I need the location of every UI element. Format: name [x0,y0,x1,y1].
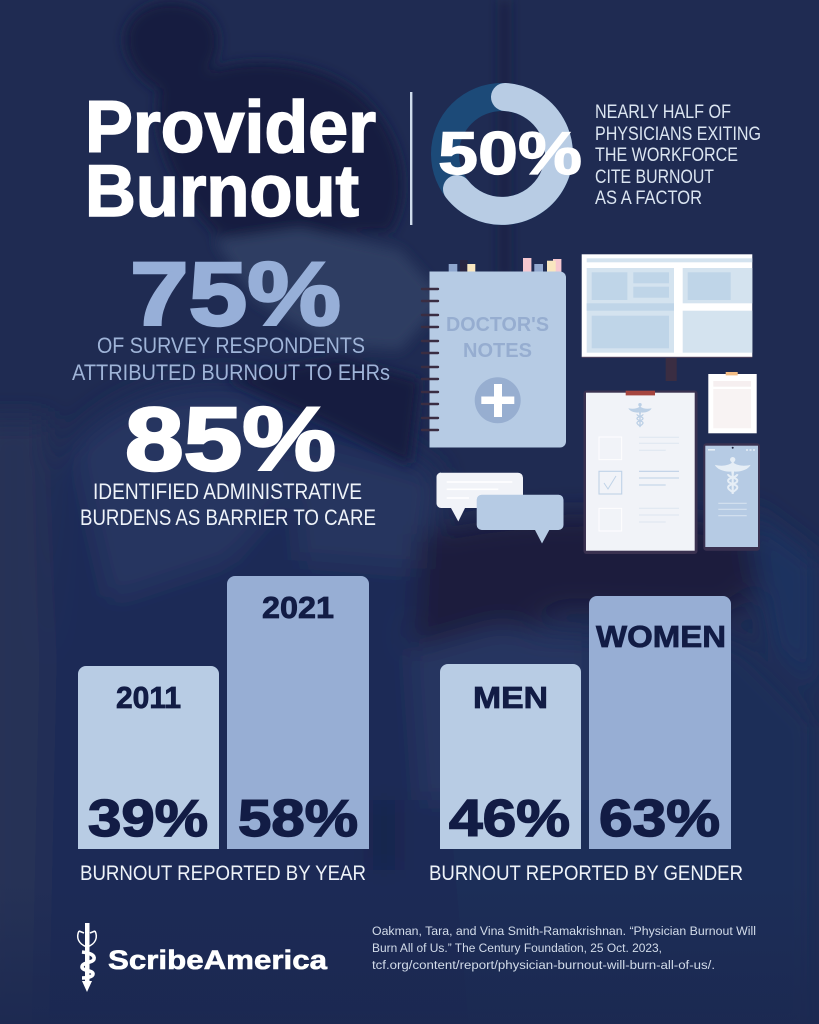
text: nearly half of physicians: AS A FACTOR [595,187,702,209]
bar: 2021 [227,576,369,849]
citation [372,924,756,972]
75% caption: ATTRIBUTED BURNOUT TO EHRs [72,360,390,385]
chart: burnout by gender [429,596,743,885]
text: nearly half of physicians: PHYSICIANS EXITING [595,123,761,145]
bar: 2021: 2021 [262,590,334,625]
stat: 75%: 75% [130,245,341,345]
icon: computer monitor [582,254,752,381]
chart: burnout by year [78,576,369,885]
bar: women: WOMEN [596,619,726,654]
75% caption: OF SURVEY RESPONDENTS [97,333,365,358]
text: nearly half of physicians: THE WORKFORCE [595,144,738,166]
title: Burnout [85,151,359,232]
icon: caduceus logo mark [78,923,96,992]
stat: 75% [72,245,390,385]
icon: small note [708,372,757,433]
citation: Burn All of Us.” The Century Foundation, 25 Oct. 2023, [372,941,662,955]
text: nearly half of physicians [595,101,761,209]
bar: 2011: 39% [88,790,208,848]
donut chart 50% [438,97,582,211]
85% caption [80,479,376,530]
bar: 2011: 2011 [116,680,181,715]
bar: 2021: 58% [238,790,358,848]
logo: ScribeAmerica: ScribeAmerica [108,945,328,975]
bar: 2011 [78,666,219,849]
title: Provider [85,87,376,168]
chart caption: by gender: BURNOUT REPORTED BY GENDER [429,862,743,885]
bar: women [589,596,731,849]
icon: clipboard checklist [584,390,698,554]
stat: 85% [80,390,376,530]
bar: men: 46% [449,790,570,848]
stat: 85%: 85% [125,390,336,490]
85% caption: BURDENS AS BARRIER TO CARE [80,505,376,530]
logo: ScribeAmerica [78,923,328,992]
bar: men: MEN [473,680,548,715]
chart caption: by year: BURNOUT REPORTED BY YEAR [80,862,366,885]
icon: chat bubbles [436,472,564,544]
icon: doctor's notes notebook: DOCTOR'S [446,314,549,336]
bar: women: 63% [599,790,720,848]
citation: tcf.org/content/report/physician-burnout-will-burn-all-of-us/. [372,958,715,972]
50% value: 50% [438,120,582,187]
citation: Oakman, Tara, and Vina Smith-Ramakrishnan. “Physician Burnout Will [372,924,756,938]
icon: doctor's notes notebook [422,258,566,448]
icon: smartphone [703,443,760,551]
title [85,87,376,232]
text: nearly half of physicians: CITE BURNOUT [595,166,714,188]
text: nearly half of physicians: NEARLY HALF OF [595,101,731,123]
bar: men [440,664,581,849]
divider [410,92,412,225]
75% caption [72,333,390,385]
icon: doctor's notes notebook: NOTES [463,340,532,362]
85% caption: IDENTIFIED ADMINISTRATIVE [93,479,362,504]
